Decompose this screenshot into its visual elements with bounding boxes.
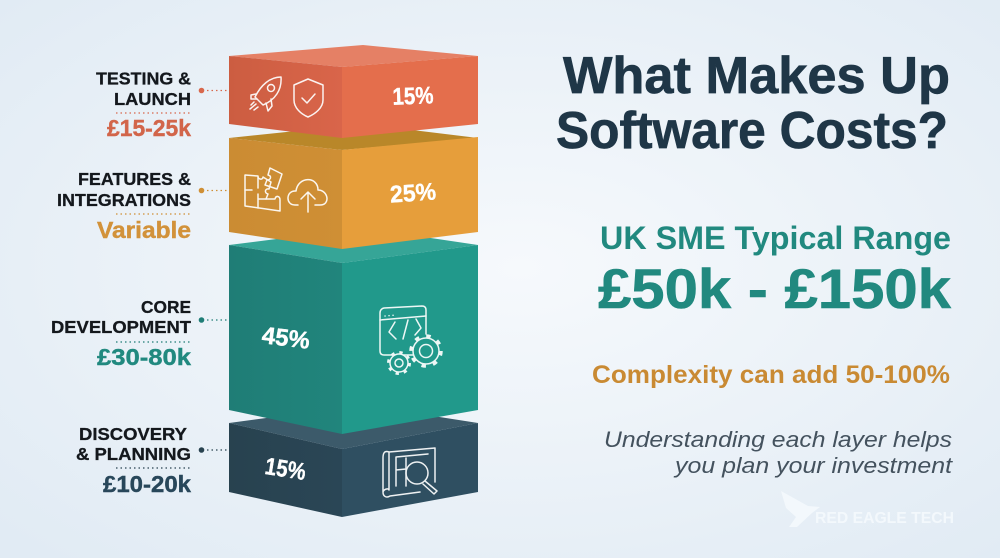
closing statement: you plan your investment	[673, 453, 953, 478]
title: What Makes Up	[563, 47, 950, 105]
icon: rocket	[250, 77, 281, 111]
subheading: UK SME typical range: UK SME Typical Range	[600, 220, 951, 256]
layer: testing and launch block	[229, 45, 478, 138]
percentage: testing: 15%	[392, 82, 434, 111]
label: testing and launch: LAUNCH	[114, 89, 191, 109]
logo: Red Eagle Tech	[781, 491, 954, 527]
label: features and integrations: FEATURES &	[78, 169, 191, 189]
label: testing and launch: £15-25k	[107, 115, 191, 141]
cost range figure: £50k - £150k	[598, 257, 952, 320]
label: discovery and planning	[76, 424, 229, 497]
complexity note: Complexity can add 50-100%	[592, 361, 950, 389]
label: features and integrations: Variable	[97, 217, 191, 243]
percentage: features: 25%	[389, 178, 437, 209]
label: testing and launch: TESTING &	[96, 68, 191, 88]
label: features and integrations	[57, 169, 229, 243]
percentage: core development: 45%	[260, 322, 311, 355]
icon: puzzle pieces	[245, 168, 282, 211]
closing statement	[604, 427, 953, 478]
label: discovery and planning: DISCOVERY	[79, 424, 187, 444]
label: features and integrations: INTEGRATIONS	[57, 190, 191, 210]
label: core development: £30-80k	[97, 344, 191, 370]
icon: cloud upload	[288, 180, 327, 212]
label: discovery and planning: & PLANNING	[76, 444, 191, 464]
closing statement: Understanding each layer helps	[604, 427, 952, 452]
layer: core development block	[229, 228, 478, 434]
icon: shield with check	[294, 79, 323, 117]
label: core development: CORE	[141, 297, 191, 317]
icon: blueprint with magnifier	[383, 448, 437, 497]
label: discovery and planning: £10-20k	[103, 471, 191, 497]
label: core development	[51, 297, 229, 370]
title	[556, 47, 950, 160]
icon: code window with gears	[380, 306, 441, 374]
label: testing and launch	[96, 68, 229, 141]
layer: features and integrations block	[229, 124, 478, 249]
title: Software Costs?	[556, 102, 948, 160]
layer: discovery and planning block	[229, 405, 478, 517]
label: core development: DEVELOPMENT	[51, 317, 191, 337]
percentage: discovery: 15%	[263, 453, 308, 486]
logo: Red Eagle Tech: RED EAGLE TECH	[815, 510, 954, 527]
